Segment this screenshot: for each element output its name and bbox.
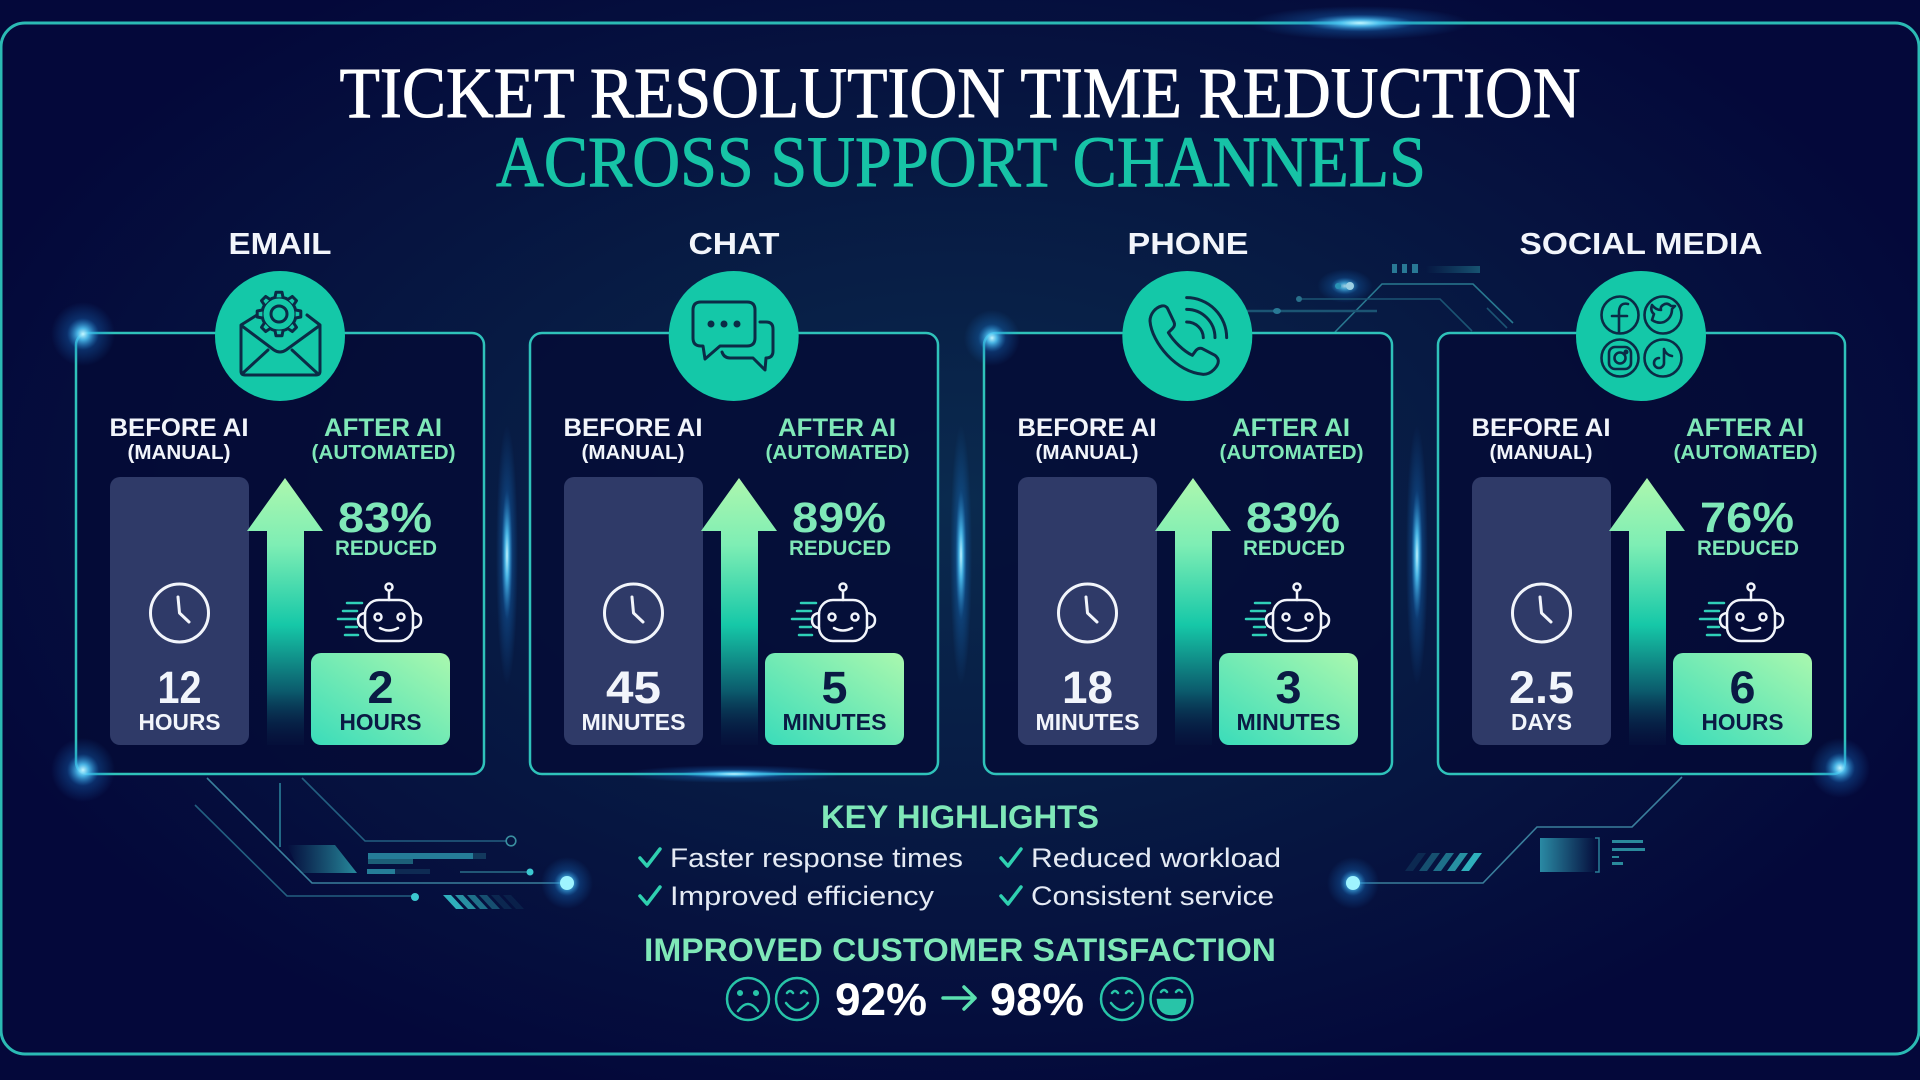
- card outline: social media: [1438, 333, 1845, 774]
- panel: social media: [1438, 226, 1845, 774]
- highlight list: Faster response times: [670, 843, 963, 873]
- satisfaction after value: 98%: [990, 974, 1084, 1025]
- card outline: chat: [530, 333, 938, 774]
- arrow: social media: [1609, 478, 1685, 745]
- arrow: email: [247, 478, 323, 745]
- after label: chat: AFTER AI: [778, 414, 896, 442]
- after bar: social media: [1673, 653, 1812, 745]
- reduction: email: [335, 494, 437, 560]
- arrow: satisfaction: [943, 987, 975, 1009]
- before bar: social media: [1472, 477, 1611, 745]
- highlight list: Reduced workload: [1031, 843, 1281, 873]
- reduction: social media: 76%: [1700, 494, 1794, 542]
- reduction: phone: 83%: [1246, 494, 1340, 542]
- reduction: email: REDUCED: [335, 537, 437, 560]
- card outline: phone: [984, 333, 1392, 774]
- before value: social media: DAYS: [1511, 709, 1572, 735]
- after label: chat: [766, 414, 910, 464]
- after bar: email: 2: [368, 662, 394, 713]
- after label: phone: AFTER AI: [1232, 414, 1350, 442]
- after bar: social media: HOURS: [1702, 709, 1784, 735]
- circuit decoration: bottom left: [195, 778, 593, 909]
- panel: email: [76, 226, 484, 774]
- before label: chat: [564, 414, 702, 464]
- heading: chat: CHAT: [688, 226, 780, 261]
- reduction: chat: 89%: [792, 494, 886, 542]
- after bar: chat: MINUTES: [782, 709, 886, 735]
- before label: chat: (MANUAL): [582, 442, 684, 464]
- before value: email: [138, 662, 220, 735]
- heading: key highlights: KEY HIGHLIGHTS: [821, 799, 1099, 835]
- before value: email: 12: [158, 662, 202, 713]
- highlight list: [670, 843, 1281, 911]
- after bar: chat: [765, 653, 904, 745]
- before bar: email: [110, 477, 249, 745]
- icon: clock: [150, 584, 208, 642]
- after label: chat: (AUTOMATED): [766, 442, 910, 464]
- customer satisfaction: [644, 932, 1276, 1025]
- before value: phone: [1036, 662, 1140, 735]
- after bar: phone: 3: [1276, 662, 1302, 713]
- icon: robot: [1700, 584, 1783, 641]
- circuit decoration: bottom right: [1327, 777, 1682, 909]
- reduction: chat: [789, 494, 891, 560]
- icon: email with gear: [215, 271, 345, 401]
- before value: social media: 2.5: [1509, 662, 1574, 713]
- before label: social media: [1472, 414, 1610, 464]
- reduction: chat: REDUCED: [789, 537, 891, 560]
- before bar: phone: [1018, 477, 1157, 745]
- icon: social networks: [1576, 271, 1706, 401]
- before label: phone: [1018, 414, 1156, 464]
- after label: social media: [1674, 414, 1818, 464]
- before label: email: (MANUAL): [128, 442, 230, 464]
- heading: social media: SOCIAL MEDIA: [1520, 226, 1762, 261]
- before label: phone: BEFORE AI: [1018, 414, 1156, 442]
- after label: email: [312, 414, 456, 464]
- after label: social media: AFTER AI: [1686, 414, 1804, 442]
- before label: email: [110, 414, 248, 464]
- before label: chat: BEFORE AI: [564, 414, 702, 442]
- before value: social media: [1509, 662, 1574, 735]
- heading: phone: PHONE: [1128, 226, 1248, 261]
- reduction: phone: [1243, 494, 1345, 560]
- icon: robot: [792, 584, 875, 641]
- after bar: phone: [1219, 653, 1358, 745]
- after label: social media: (AUTOMATED): [1674, 442, 1818, 464]
- after label: email: AFTER AI: [324, 414, 442, 442]
- before value: phone: 18: [1062, 662, 1113, 713]
- after bar: email: [311, 653, 450, 745]
- reduction: social media: [1697, 494, 1799, 560]
- before label: phone: (MANUAL): [1036, 442, 1138, 464]
- satisfaction before value: 92%: [835, 974, 927, 1025]
- icon: phone handset: [1122, 271, 1252, 401]
- after bar: social media: 6: [1730, 662, 1756, 713]
- after bar: chat: 5: [822, 662, 848, 713]
- before label: social media: BEFORE AI: [1472, 414, 1610, 442]
- before value: chat: 45: [606, 662, 661, 713]
- after bar: phone: MINUTES: [1236, 709, 1340, 735]
- highlight list: Consistent service: [1031, 881, 1274, 911]
- before label: social media: (MANUAL): [1490, 442, 1592, 464]
- highlight list: Improved efficiency: [670, 881, 935, 911]
- title: TICKET RESOLUTION TIME REDUCTION: [340, 53, 1580, 133]
- after label: phone: (AUTOMATED): [1220, 442, 1364, 464]
- before label: email: BEFORE AI: [110, 414, 248, 442]
- icon: robot: [338, 584, 421, 641]
- icon: clock: [1512, 584, 1570, 642]
- before value: chat: MINUTES: [582, 709, 686, 735]
- card outline: email: [76, 333, 484, 774]
- heading: customer satisfaction: IMPROVED CUSTOMER SATISFACTION: [644, 932, 1276, 968]
- before value: email: HOURS: [138, 709, 220, 735]
- icon: check marks: [640, 849, 1021, 904]
- arrow: chat: [701, 478, 777, 745]
- icon: robot: [1246, 584, 1329, 641]
- heading: email: EMAIL: [228, 226, 332, 261]
- reduction: phone: REDUCED: [1243, 537, 1345, 560]
- title: ACROSS SUPPORT CHANNELS: [496, 122, 1426, 202]
- panel: chat: [530, 226, 938, 774]
- reduction: social media: REDUCED: [1697, 537, 1799, 560]
- card glows: [51, 302, 1870, 802]
- after label: email: (AUTOMATED): [312, 442, 456, 464]
- circuit decoration: top right: [1247, 264, 1513, 332]
- after label: phone: [1220, 414, 1364, 464]
- after bar: email: HOURS: [340, 709, 422, 735]
- panel: phone: [984, 226, 1392, 774]
- before value: phone: MINUTES: [1036, 709, 1140, 735]
- icon: clock: [1058, 584, 1116, 642]
- icon: clock: [604, 584, 662, 642]
- before bar: chat: [564, 477, 703, 745]
- reduction: email: 83%: [338, 494, 432, 542]
- before value: chat: [582, 662, 686, 735]
- title: [340, 53, 1580, 202]
- icon: satisfaction faces: [727, 978, 1192, 1020]
- key highlights: [640, 799, 1281, 911]
- icon: chat bubbles: [669, 271, 799, 401]
- arrow: phone: [1155, 478, 1231, 745]
